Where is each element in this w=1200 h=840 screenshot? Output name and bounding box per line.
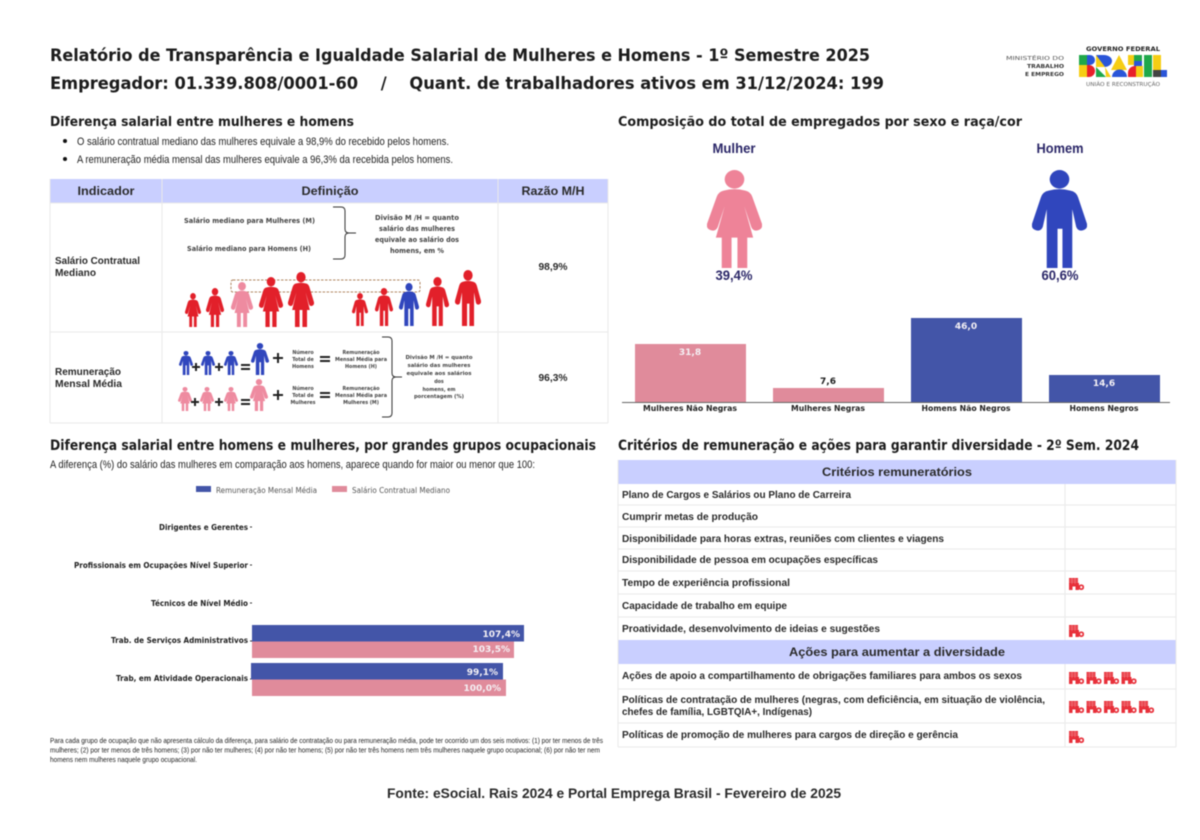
bracket and division text: equivale aos salários [406, 370, 472, 377]
table heading: ações diversidade: Ações para aumentar a diversidade [789, 645, 1005, 659]
criteria rows: Capacidade de trabalho em equipe [622, 601, 787, 612]
definition text: salário mediano [184, 207, 459, 259]
icons: empresas [1069, 578, 1153, 743]
row label: salário contratual mediano: Salário Contratual [55, 256, 140, 267]
formula: homens [179, 343, 387, 375]
criteria rows: Tempo de experiência profissional [622, 578, 790, 589]
bracket and division text: porcentagem (%) [414, 394, 464, 400]
criteria rows: Disponibilidade de pessoa em ocupações específicas [622, 555, 878, 566]
icon: homem 60,6% [1032, 141, 1087, 283]
row label: salário contratual mediano: Mediano [55, 268, 96, 279]
definition text: salário mediano: Divisão M /H = quanto [375, 214, 459, 222]
bar chart: sexo e raça/cor: 7,6 [820, 377, 836, 387]
action rows: Ações de apoio a compartilhamento de obrigações familiares para ambos os sexos [622, 671, 1022, 682]
formula: homens: Total de [292, 357, 314, 363]
bullet list [63, 136, 453, 166]
formula: mulheres [178, 379, 387, 411]
bracket and division text [382, 337, 473, 417]
bar chart: grupos ocupacionais: 99,1% [467, 668, 498, 678]
icon: homem 60,6%: 60,6% [1042, 268, 1078, 283]
formula: mulheres: Mulheres [291, 400, 316, 406]
bar chart: grupos ocupacionais: Técnicos de Nível Médio [151, 599, 248, 608]
logo: ministério do trabalho e emprego: TRABALHO [1027, 64, 1065, 70]
value: 98,9%: 98,9% [538, 262, 568, 273]
table heading: critérios remuneratórios: Critérios remuneratórios [822, 465, 972, 479]
definition text: salário mediano: homens, em % [390, 247, 444, 255]
icon: homem 60,6%: Homem [1036, 141, 1084, 156]
bar chart: sexo e raça/cor: 31,8 [679, 348, 701, 358]
heading: diferença salarial: Diferença salarial entre mulheres e homens [50, 114, 354, 130]
bullet list: A remuneração média mensal das mulheres equivale a 96,3% da recebida pelos homens. [77, 154, 453, 166]
action rows: chefes de família, LGBTQIA+, Indígenas) [622, 707, 812, 718]
logo: ministério do trabalho e emprego: E EMPREGO [1025, 72, 1065, 78]
value: 96,3%: 96,3% [538, 373, 568, 384]
definition text: salário mediano: salário das mulheres [379, 225, 455, 233]
heading: grupos ocupacionais: Diferença salarial entre homens e mulheres, por grandes grupos ocupacionais [50, 438, 596, 454]
formula: homens: Homens (H) [345, 364, 377, 370]
table header: Indicador [78, 184, 135, 198]
formula: mulheres: Remuneração [342, 386, 380, 392]
row label: remuneração mensal média: Mensal Média [55, 379, 122, 390]
footnote [50, 736, 603, 764]
table header: Definição [302, 184, 358, 198]
row label: remuneração mensal média [55, 367, 122, 390]
definition text: salário mediano: Salário mediano para Mulheres (M) [184, 217, 315, 225]
bar chart: grupos ocupacionais: Trab, em Atividade Operacionais [116, 674, 248, 683]
criteria rows [622, 490, 944, 635]
bar chart: grupos ocupacionais: Profissionais em Ocupações Nível Superior [74, 561, 248, 570]
title: Relatório de Transparência e Igualdade Salarial de Mulheres e Homens - 1º Semestre 2025 [50, 46, 870, 66]
bar chart: grupos ocupacionais [74, 523, 524, 696]
bar chart: grupos ocupacionais: Dirigentes e Gerentes [159, 523, 248, 532]
legend: Salário Contratual Mediano [352, 486, 450, 495]
formula: mulheres: Número [292, 385, 314, 392]
logo: governo federal brasil: UNIÃO E RECONSTRUÇÃO [1086, 81, 1160, 88]
title: Empregador: 01.339.808/0001-60 / Quant. de trabalhadores ativos em 31/12/2024: 199 [50, 74, 884, 94]
bar chart: sexo e raça/cor: 14,6 [1093, 379, 1115, 389]
icon: mulher 39,4% [707, 141, 762, 283]
bar chart: grupos ocupacionais: 107,4% [482, 630, 520, 640]
bar chart: sexo e raça/cor [622, 318, 1170, 413]
bar chart: grupos ocupacionais: 100,0% [464, 684, 501, 694]
definition text: salário mediano: equivale ao salário dos [375, 236, 459, 244]
bar chart: sexo e raça/cor: 46,0 [955, 322, 977, 332]
logo: ministério do trabalho e emprego [1006, 54, 1065, 78]
source: Fonte: eSocial. Rais 2024 e Portal Emprega Brasil - Fevereiro de 2025 [387, 785, 841, 801]
formula: homens: Homens [292, 364, 314, 370]
formula: homens: Remuneração [342, 350, 380, 356]
logo: ministério do trabalho e emprego: MINISTÉRIO DO [1006, 54, 1064, 62]
action rows: Políticas de promoção de mulheres para cargos de direção e gerência [622, 730, 958, 741]
bracket and division text: dos [434, 379, 444, 385]
panel: tabela indicador definição razão [50, 179, 608, 423]
footnote: homens nem mulheres naquele grupo ocupacional. [50, 755, 197, 764]
row label: remuneração mensal média: Remuneração [55, 367, 121, 378]
heading: composição: Composição do total de empregados por sexo e raça/cor [618, 114, 1022, 130]
formula: homens: Número [292, 349, 314, 356]
icon: mulher 39,4%: 39,4% [716, 268, 752, 283]
table header [78, 184, 584, 198]
formula: mulheres: Total de [292, 393, 314, 399]
bar chart: sexo e raça/cor: Mulheres Não Negras [643, 404, 737, 413]
legend: Remuneração Mensal Média [216, 486, 317, 495]
definition text: salário mediano: Salário mediano para Homens (H) [187, 245, 311, 253]
bar chart: sexo e raça/cor: Homens Não Negros [922, 404, 1011, 413]
bar chart: sexo e raça/cor: Homens Negros [1070, 404, 1139, 413]
action rows: Políticas de contratação de mulheres (negras, com deficiência, em situação de violência, [622, 695, 1045, 706]
title [50, 46, 884, 94]
bar chart: sexo e raça/cor: Mulheres Negras [791, 404, 865, 413]
criteria rows: Cumprir metas de produção [622, 512, 758, 523]
row label: salário contratual mediano [55, 256, 140, 279]
panel: critérios remuneratórios e ações [618, 460, 1176, 747]
formula: mulheres: Mensal Média para [335, 392, 387, 399]
criteria rows: Plano de Cargos e Salários ou Plano de Carreira [622, 490, 851, 501]
bar chart: grupos ocupacionais: 103,5% [472, 645, 510, 655]
action rows [622, 671, 1045, 741]
criteria rows: Proatividade, desenvolvimento de ideias e sugestões [622, 624, 880, 635]
bracket and division text: salário das mulheres [408, 362, 471, 369]
formula: mulheres: Mulheres (M) [343, 400, 379, 406]
logo: governo federal brasil: GOVERNO FEDERAL [1086, 46, 1160, 53]
bullet list: O salário contratual mediano das mulheres equivale a 98,9% do recebido pelos homens. [77, 136, 449, 148]
legend [196, 486, 450, 495]
heading: critérios: Critérios de remuneração e ações para garantir diversidade - 2º Sem. 2024 [618, 438, 1139, 454]
table header: Razão M/H [522, 184, 584, 198]
bracket and division text: homens, em [423, 387, 455, 393]
bar chart: grupos ocupacionais: Trab. de Serviços Administrativos [111, 636, 248, 645]
footnote: mulheres; (2) por ter menos de três homens; (3) por não ter mulheres; (4) por não ter homens; (5) por não ter três homens nem três mulheres naquele grupo ocupacional; (6) por não ter nem [50, 746, 600, 754]
footnote: Para cada grupo de ocupação que não apresenta cálculo da diferença, para salário de contratação ou para remuneração média, pode ter ocorrido um dos seis motivos: (1) por ter menos de três [50, 736, 603, 745]
icon: mulher 39,4%: Mulher [712, 141, 756, 156]
bracket and division text: Divisão M /H = quanto [406, 355, 473, 361]
criteria rows: Disponibilidade para horas extras, reuniões com clientes e viagens [622, 534, 944, 545]
subtitle: grupos ocupacionais: A diferença (%) do salário das mulheres em comparação aos homens, aparece quando for maior ou menor que 100: [50, 459, 535, 471]
logo: governo federal brasil [1079, 46, 1167, 88]
icon row: pessoas mediana [185, 270, 481, 327]
formula: homens: Mensal Média para [335, 356, 387, 363]
